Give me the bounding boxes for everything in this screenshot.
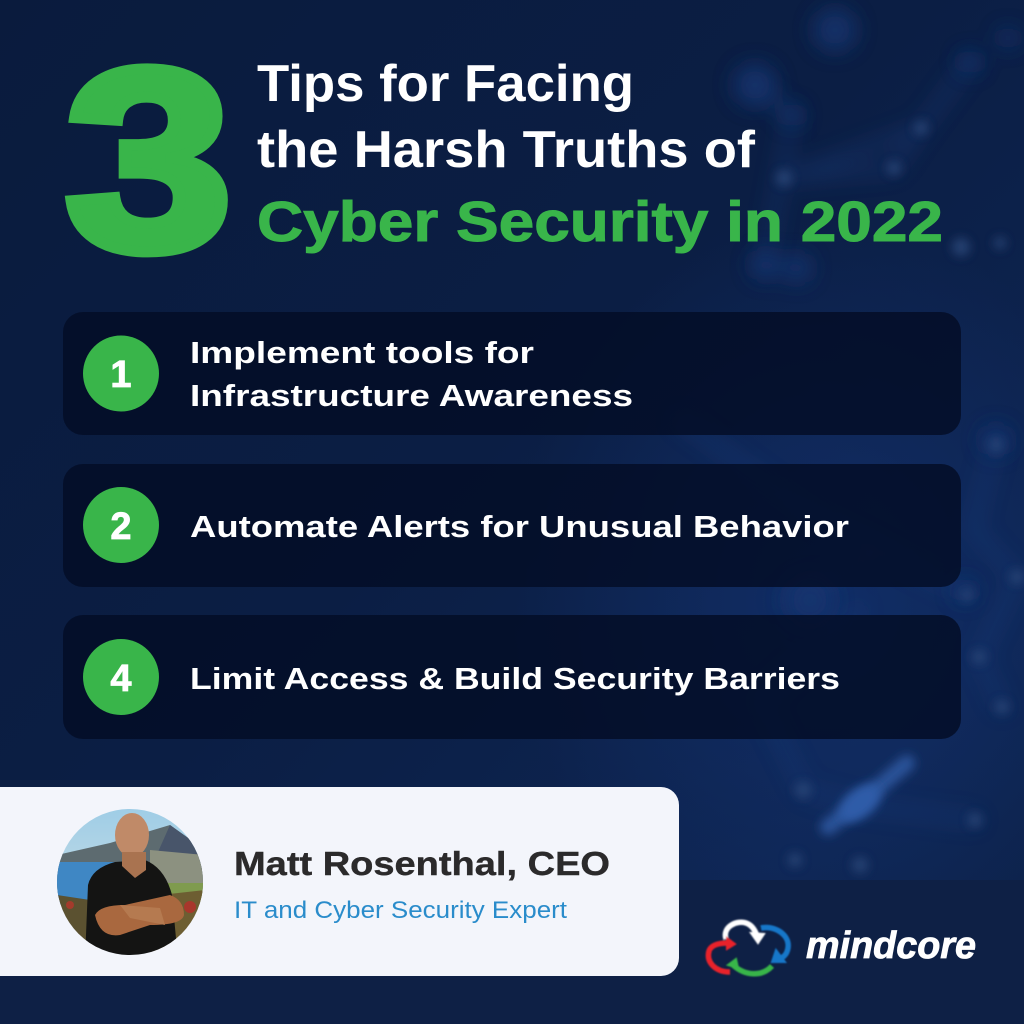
tip 1 text: Infrastructure Awareness [190,378,633,413]
icon: number 2 badge: 2 [110,506,132,548]
name: Matt Rosenthal, CEO [234,845,610,882]
big numeral 3: 3 [65,16,232,304]
title [257,55,943,254]
background network pattern [680,8,1024,873]
tip 2 text: Automate Alerts for Unusual Behavior [190,509,849,544]
icon: number 4 badge: 4 [110,658,132,700]
title: Tips for Facing [257,55,634,113]
tip 1 text [190,335,633,413]
panel: tip 1 [63,312,961,435]
tip 1 text: Implement tools for [190,335,534,370]
icon: cloud of arrows [708,922,788,974]
wordmark: mindcore [806,925,976,967]
icon: number 1 badge: 1 [110,354,132,396]
portrait photo [57,809,205,960]
job title: IT and Cyber Security Expert [234,897,567,924]
icon: number 2 badge [83,487,159,563]
panel: tip 2 [63,464,961,587]
logo: mindcore [708,922,976,974]
tip 4 text: Limit Access & Build Security Barriers [190,661,840,696]
footer band [0,880,1024,1024]
panel: tip 4 [63,615,961,739]
panel: author card [0,787,679,976]
icon: number 4 badge [83,639,159,715]
icon: number 1 badge [83,336,159,412]
title: Cyber Security in 2022 [257,190,943,254]
title: the Harsh Truths of [257,121,756,179]
